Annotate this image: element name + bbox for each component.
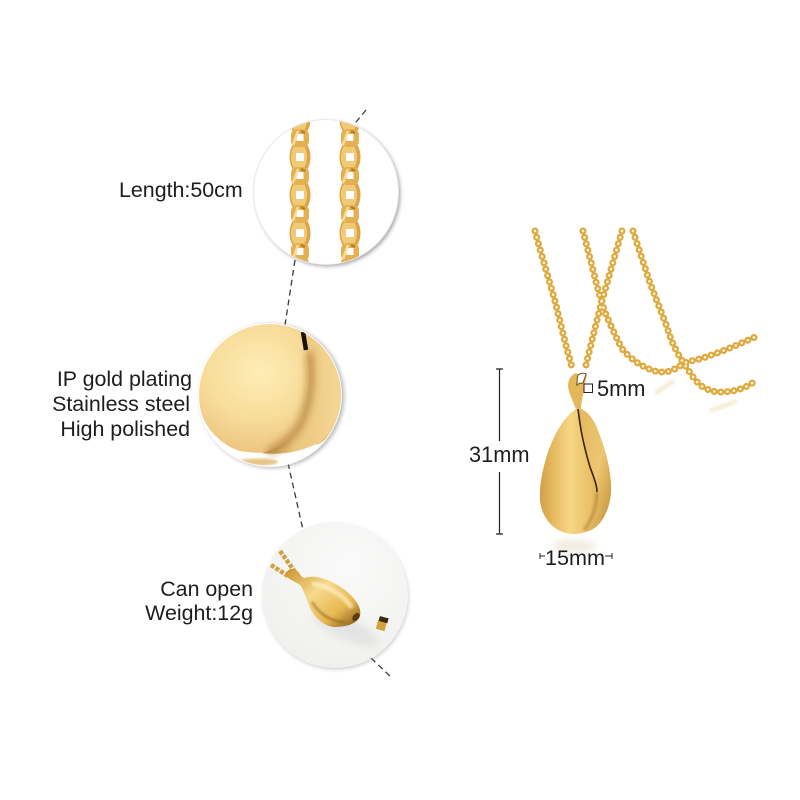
label: plating material: Stainless steel bbox=[52, 392, 190, 416]
label: plating material: High polished bbox=[60, 417, 190, 441]
icon: chain close-up bbox=[290, 121, 360, 262]
dimension: 15mm: 15mm bbox=[545, 545, 605, 570]
panel: gold plating circle bbox=[198, 323, 344, 468]
icon: teardrop pendant bbox=[540, 373, 611, 552]
label: length: Length:50cm bbox=[119, 178, 243, 202]
label: plating material: IP gold plating bbox=[57, 367, 192, 391]
icon: small chain bbox=[271, 551, 295, 576]
dashed connector lines bbox=[285, 110, 392, 678]
dimension: 5mm: 5mm bbox=[597, 376, 645, 401]
icon: open pendant bbox=[285, 569, 361, 627]
panel: open pendant circle bbox=[262, 522, 408, 669]
label: open and weight bbox=[145, 577, 253, 625]
label: plating material bbox=[52, 367, 192, 441]
panel: chain detail circle bbox=[253, 119, 403, 269]
necklace chains bbox=[535, 231, 755, 410]
label: open and weight: Weight:12g bbox=[145, 601, 253, 625]
icon: pendant cap bbox=[376, 616, 389, 631]
label: open and weight: Can open bbox=[160, 577, 253, 601]
dimension: 31mm: 31mm bbox=[469, 442, 530, 467]
dimension: 31mm bbox=[469, 369, 530, 534]
